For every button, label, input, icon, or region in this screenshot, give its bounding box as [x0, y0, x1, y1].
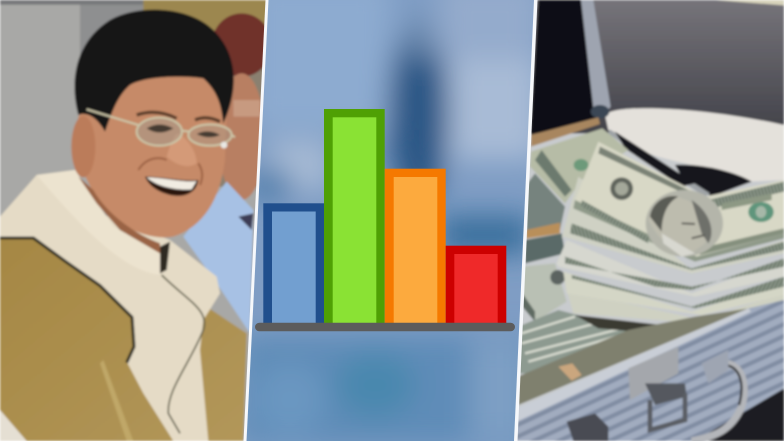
panel: blurred blue backdrop [240, 0, 540, 441]
mouth [145, 177, 198, 196]
case lid [531, 0, 611, 147]
bar: blue [263, 203, 324, 323]
kurta [0, 233, 247, 441]
background colleague [183, 13, 272, 333]
back bills [522, 128, 628, 322]
bar chart [255, 109, 515, 331]
green seal [748, 202, 774, 222]
portrait [646, 190, 723, 257]
vest [0, 170, 220, 441]
top bill [575, 142, 784, 257]
rim [608, 129, 710, 197]
panel: briefcase of dollars photo [515, 0, 784, 441]
hair [75, 10, 234, 132]
handle [692, 363, 744, 441]
bottom stack [518, 308, 748, 405]
bar: orange [385, 169, 446, 323]
face [78, 60, 227, 238]
bar: green [324, 109, 385, 323]
white tray [605, 108, 784, 182]
dividers [244, 0, 538, 441]
chart baseline [255, 323, 515, 331]
bar: red [446, 246, 506, 323]
panel: man laughing photo [0, 0, 272, 441]
fan of bills [557, 142, 784, 323]
case body [517, 300, 784, 441]
glasses [87, 109, 235, 146]
latch [628, 347, 678, 400]
